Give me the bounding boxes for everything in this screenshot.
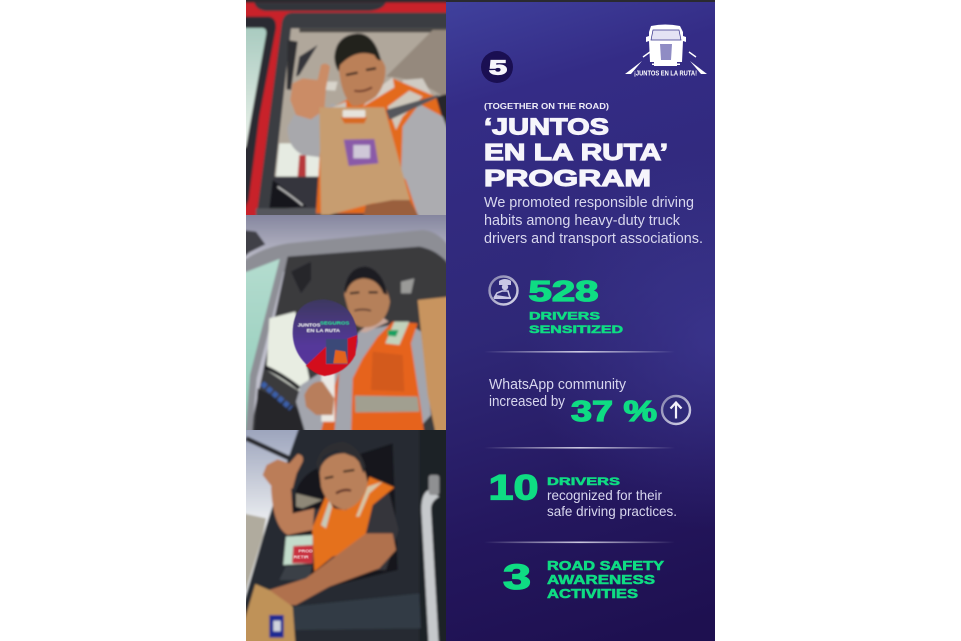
stat: 528 drivers sensitized: DRIVERS [529, 310, 601, 322]
thumbs up fist [290, 64, 330, 119]
seat belt [386, 95, 439, 120]
red banner lettering: PROD [298, 549, 313, 555]
torso / vest [316, 78, 443, 213]
stat: 10 drivers recognized: DRIVERS [547, 476, 621, 488]
eyebrow: together on the road: (TOGETHER ON THE ROAD) [484, 102, 609, 111]
round sign: SEGUROS [320, 321, 350, 327]
top dark strip [246, 0, 715, 2]
hand bottom [362, 199, 419, 215]
photo: driver holding round Juntos Seguros sign [243, 212, 449, 435]
raised arm [271, 487, 314, 535]
torso [303, 493, 399, 570]
stat: 3 road safety awareness activities: ACTIVITIES [547, 587, 638, 601]
windows [286, 443, 398, 587]
intro text: We promoted responsible driving [484, 194, 694, 211]
red banner lettering [294, 549, 313, 561]
sign stick and hand [321, 372, 335, 422]
number badge 5 [481, 51, 513, 83]
stat: 528 drivers sensitized: 528 [528, 276, 598, 308]
right sleeve [401, 104, 449, 220]
title: EN LA RUTA’ [484, 139, 668, 165]
logo: Juntos en la Ruta truck [625, 24, 707, 78]
head [344, 274, 390, 327]
round sign: JUNTOS [298, 322, 321, 328]
title: ‘JUNTOS [484, 114, 609, 140]
icon: driver at steering wheel [490, 276, 518, 304]
intro text: drivers and transport associations. [484, 230, 703, 247]
head [319, 453, 368, 510]
QR card [344, 139, 378, 166]
stat: 528 drivers sensitized [528, 276, 623, 336]
stat: WhatsApp community 37 percent: 37 % [571, 396, 657, 428]
round sign: EN LA RUTA [307, 328, 340, 334]
intro text: habits among heavy-duty truck [484, 212, 680, 229]
stat: 10 drivers recognized: safe driving practices. [547, 503, 677, 519]
grey shirt [296, 322, 431, 435]
stat: WhatsApp community 37 percent [489, 377, 657, 428]
forearm across [268, 533, 396, 605]
paper bag [319, 107, 410, 215]
title [484, 114, 668, 191]
sleeve left [288, 104, 334, 158]
intro text [484, 194, 703, 247]
stat: 3 road safety awareness activities: ROAD SAFETY [547, 559, 665, 573]
paper bag [418, 297, 449, 435]
orange vest [351, 322, 424, 435]
stat: WhatsApp community 37 percent: increased by [489, 394, 566, 410]
stat: 3 road safety awareness activities [503, 558, 665, 601]
stat: 10 drivers recognized: recognized for their [547, 487, 662, 503]
round sign [293, 299, 358, 376]
stat: 3 road safety awareness activities: AWARENESS [547, 573, 655, 587]
stat: 10 drivers recognized [488, 468, 677, 519]
grab handle [421, 490, 439, 641]
photo: driver in red truck with thumbs up and paper bag [243, 0, 449, 220]
title: PROGRAM [484, 165, 651, 191]
stat: 10 drivers recognized: 10 [488, 468, 538, 508]
paper bag [243, 584, 295, 641]
head [339, 50, 385, 106]
photo: driver leaning out of dark truck window [243, 427, 449, 641]
stat: 3 road safety awareness activities: 3 [503, 558, 531, 597]
stat: WhatsApp community 37 percent: WhatsApp community [489, 377, 627, 393]
collar [359, 315, 389, 332]
stat: 528 drivers sensitized: SENSITIZED [529, 324, 623, 336]
icon: up arrow [662, 396, 690, 424]
number badge 5: 5 [489, 58, 507, 80]
red banner lettering: RETIR [294, 555, 309, 561]
panel: program summary background [446, 2, 715, 641]
logo: Juntos en la Ruta truck: ¡JUNTOS EN LA RUTA! [634, 68, 697, 78]
